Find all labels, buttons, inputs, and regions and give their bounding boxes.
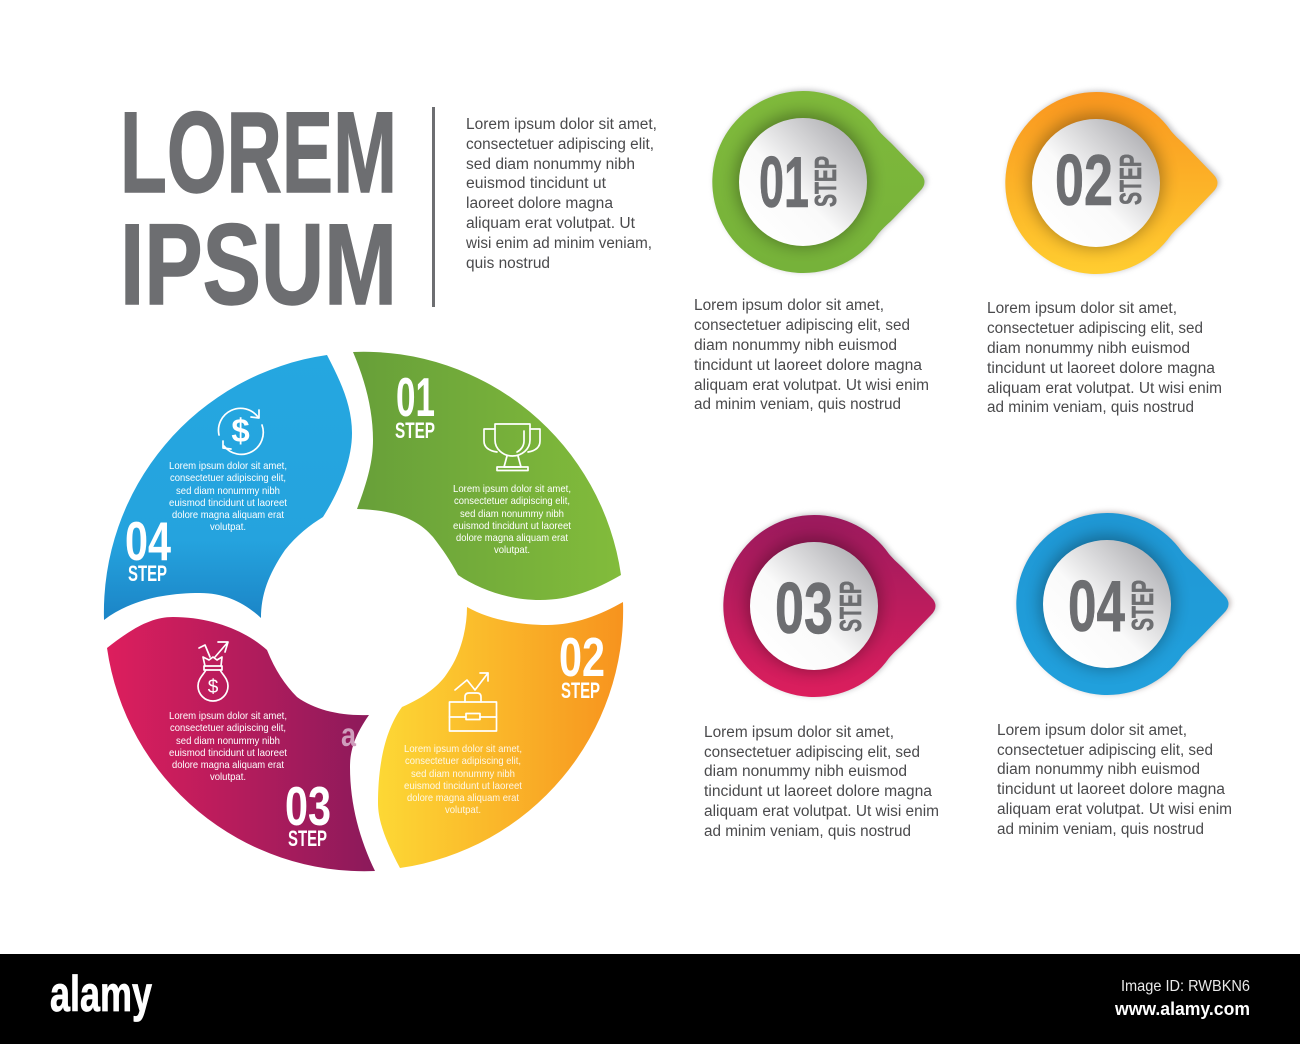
text block: step 01: diam nonummy nibh euismod: [694, 337, 897, 354]
text block: step 04: aliquam erat volutpat. Ut wisi enim: [997, 801, 1232, 818]
icon: dollar cycle: $: [231, 412, 250, 449]
footer logo: alamy: [50, 966, 152, 1022]
step 02 description: euismod tincidunt ut laoreet: [404, 780, 522, 792]
step 02 description: [404, 743, 522, 816]
step 02 description: Lorem ipsum dolor sit amet,: [404, 743, 522, 755]
step 03 number: 03: [285, 775, 331, 837]
badge: step 03: 03: [775, 569, 833, 649]
cycle diagram: [104, 352, 623, 871]
text block: step 01: Lorem ipsum dolor sit amet,: [694, 297, 884, 314]
step 01 number: 01: [396, 366, 435, 428]
step 01 description: sed diam nonummy nibh: [460, 508, 564, 520]
step 04 number: STEP: [128, 561, 167, 586]
title divider: [432, 107, 435, 307]
badge: step 01: [712, 90, 926, 273]
text block: step 02: Lorem ipsum dolor sit amet,: [987, 300, 1177, 317]
intro text block: euismod tincidunt ut: [466, 175, 607, 192]
intro text block: laoreet dolore magna: [466, 195, 613, 212]
step 01 number: [395, 366, 435, 443]
step 04 description: Lorem ipsum dolor sit amet,: [169, 460, 287, 472]
badge: step 03: [723, 514, 938, 697]
step 03 description: consectetuer adipiscing elit,: [170, 722, 286, 734]
step 02 description: sed diam nonummy nibh: [411, 768, 515, 780]
text block: step 03: Lorem ipsum dolor sit amet,: [704, 724, 894, 741]
text block: step 01: ad minim veniam, quis nostrud: [694, 396, 901, 413]
step 03 number: STEP: [288, 826, 327, 851]
segment: step 03 magenta: [107, 617, 375, 871]
step 04 description: consectetuer adipiscing elit,: [170, 472, 286, 484]
step 01 description: [453, 483, 571, 556]
step 03 description: sed diam nonummy nibh: [176, 735, 280, 747]
text block: step 01: aliquam erat volutpat. Ut wisi enim: [694, 377, 929, 394]
text block: step 01: consectetuer adipiscing elit, sed: [694, 317, 910, 334]
step 03 description: volutpat.: [210, 771, 246, 783]
badge: step 03: STEP: [833, 581, 868, 632]
text block: step 03: [704, 724, 939, 840]
step 01 description: Lorem ipsum dolor sit amet,: [453, 483, 571, 495]
footer bar: [0, 954, 1300, 1044]
step 02 description: volutpat.: [445, 804, 481, 816]
text block: step 02: diam nonummy nibh euismod: [987, 340, 1190, 357]
intro text block: aliquam erat volutpat. Ut: [466, 215, 636, 232]
badge: step 02: 02: [1055, 141, 1113, 221]
intro text block: consectetuer adipiscing elit,: [466, 136, 654, 153]
intro text block: quis nostrud: [466, 255, 550, 272]
text block: step 01: tincidunt ut laoreet dolore magna: [694, 357, 922, 374]
text block: step 02: consectetuer adipiscing elit, sed: [987, 320, 1203, 337]
text block: step 02: aliquam erat volutpat. Ut wisi enim: [987, 380, 1222, 397]
step 01 number: STEP: [395, 418, 435, 443]
step 03 description: euismod tincidunt ut laoreet: [169, 747, 287, 759]
badge: step 02: [1005, 91, 1220, 274]
text block: step 03: consectetuer adipiscing elit, sed: [704, 744, 920, 761]
step 02 number: [559, 626, 605, 703]
text block: step 04: diam nonummy nibh euismod: [997, 761, 1200, 778]
title: IPSUM: [120, 201, 397, 329]
text block: step 04: [997, 722, 1232, 838]
step 01 description: euismod tincidunt ut laoreet: [453, 520, 571, 532]
segment: step 04 blue: [104, 355, 352, 620]
icon: briefcase with growth arrow: [450, 673, 496, 731]
step 04 description: volutpat.: [210, 521, 246, 533]
step 04 description: [169, 460, 287, 533]
step 04 number: [125, 510, 171, 586]
icon: money bag with arrows: $: [208, 677, 219, 698]
text block: step 04: tincidunt ut laoreet dolore magna: [997, 781, 1225, 798]
footer website: www.alamy.com: [1114, 999, 1250, 1019]
step 04 description: sed diam nonummy nibh: [176, 485, 280, 497]
badge: step 04: [1016, 512, 1230, 695]
step 04 description: euismod tincidunt ut laoreet: [169, 497, 287, 509]
segment: step 02 yellow: [378, 602, 623, 868]
text block: step 03: diam nonummy nibh euismod: [704, 763, 907, 780]
icon: dollar cycle: [218, 408, 263, 454]
title: LOREM: [120, 89, 397, 217]
badge: step 04: 04: [1068, 567, 1125, 647]
footer image id: Image ID: RWBKN6: [1121, 978, 1250, 995]
text block: step 04: Lorem ipsum dolor sit amet,: [997, 722, 1187, 739]
text block: step 02: tincidunt ut laoreet dolore magna: [987, 360, 1215, 377]
badge: step 01: STEP: [808, 156, 843, 207]
step 02 number: STEP: [561, 678, 600, 703]
intro text block: Lorem ipsum dolor sit amet,: [466, 116, 657, 133]
step 03 number: [285, 775, 331, 851]
text block: step 01: [694, 297, 929, 413]
text block: step 03: tincidunt ut laoreet dolore magna: [704, 783, 932, 800]
step 03 description: [169, 710, 287, 783]
step 03 description: Lorem ipsum dolor sit amet,: [169, 710, 287, 722]
text block: step 03: ad minim veniam, quis nostrud: [704, 823, 911, 840]
intro text block: sed diam nonummy nibh: [466, 156, 635, 173]
segment: step 01 green: [353, 352, 621, 600]
step 03 description: dolore magna aliquam erat: [172, 759, 284, 771]
step 01 description: dolore magna aliquam erat: [456, 532, 568, 544]
intro text block: [465, 116, 657, 272]
step 02 description: dolore magna aliquam erat: [407, 792, 519, 804]
text block: step 04: consectetuer adipiscing elit, sed: [997, 742, 1213, 759]
step 01 description: consectetuer adipiscing elit,: [454, 495, 570, 507]
step 01 description: volutpat.: [494, 544, 530, 556]
badge: step 01: 01: [759, 143, 809, 223]
step 02 description: consectetuer adipiscing elit,: [405, 755, 521, 767]
text block: step 02: [987, 300, 1222, 416]
intro text block: wisi enim ad minim veniam,: [465, 235, 652, 252]
title: [120, 89, 397, 329]
text block: step 04: ad minim veniam, quis nostrud: [997, 821, 1204, 838]
badge: step 02: STEP: [1113, 154, 1148, 205]
icon: money bag with arrows: [198, 642, 228, 701]
watermark letter: a: [341, 716, 357, 753]
text block: step 02: ad minim veniam, quis nostrud: [987, 399, 1194, 416]
step 02 number: 02: [559, 626, 605, 688]
icon: trophy: [484, 424, 540, 470]
step 04 description: dolore magna aliquam erat: [172, 509, 284, 521]
step 04 number: 04: [125, 510, 171, 572]
badge: step 04: STEP: [1125, 580, 1160, 631]
text block: step 03: aliquam erat volutpat. Ut wisi enim: [704, 803, 939, 820]
